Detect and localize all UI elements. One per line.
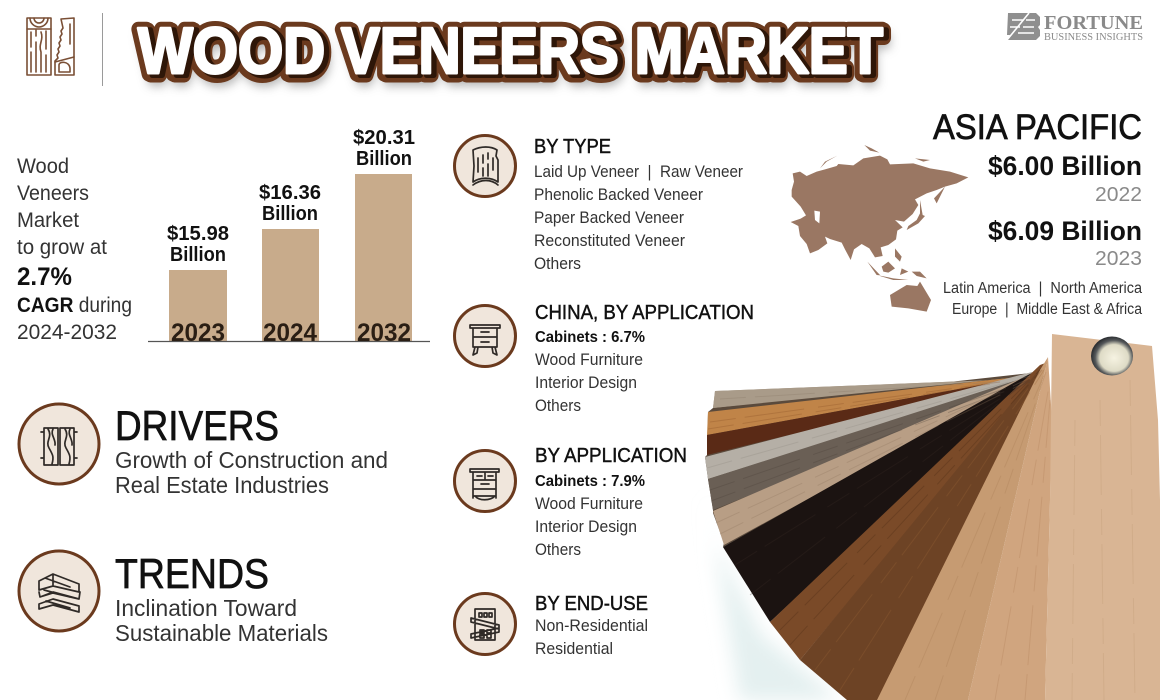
bar chart: 2024 xyxy=(263,319,317,347)
icon: nightstand xyxy=(454,306,516,366)
logo: Fortune Business Insights xyxy=(1007,12,1143,43)
panel: China by application: Interior Design xyxy=(535,374,637,392)
title: WOOD VENEERS MARKET xyxy=(138,15,883,88)
image: wood veneer fan xyxy=(705,334,1160,700)
CAGR text block: 2024-2032 xyxy=(17,321,117,344)
CAGR text block: CAGR during xyxy=(17,294,132,317)
panel: Asia Pacific stats: Latin America | North America xyxy=(943,280,1142,297)
icon: stacked boards xyxy=(19,551,99,631)
panel: Asia Pacific stats: 2023 xyxy=(1095,248,1142,270)
icon: building xyxy=(454,594,516,654)
panel: by application: Cabinets : 7.9% xyxy=(535,473,645,490)
icon: wood planks xyxy=(19,404,99,484)
panel: trends xyxy=(19,550,328,646)
panel: by application: Wood Furniture xyxy=(535,495,643,513)
panel: Asia Pacific stats xyxy=(933,108,1142,318)
CAGR text block: 2.7% xyxy=(17,263,72,291)
bar chart: 2023 xyxy=(171,319,225,347)
panel: trends: Inclination Toward xyxy=(115,595,297,621)
panel: by type: Reconstituted Veneer xyxy=(534,232,685,250)
bar chart: Billion xyxy=(356,148,412,170)
map: Asia Pacific xyxy=(791,145,968,312)
panel: drivers: DRIVERS xyxy=(115,402,279,449)
title: WOOD VENEERS MARKET xyxy=(138,14,883,87)
panel: by type: Others xyxy=(534,255,581,273)
header icon: wood log and saw xyxy=(27,18,74,75)
logo: Fortune Business Insights: BUSINESS INSIGHTS xyxy=(1044,32,1143,43)
panel: by type xyxy=(454,136,743,273)
panel: China by application: CHINA, BY APPLICATION xyxy=(535,302,754,324)
bar chart: $15.98 xyxy=(167,223,229,245)
panel: Asia Pacific stats: 2022 xyxy=(1095,184,1142,206)
panel: Asia Pacific stats: $6.09 Billion xyxy=(988,216,1142,246)
panel: by end-use: BY END-USE xyxy=(535,593,648,615)
bar chart: Billion xyxy=(262,203,318,225)
panel: drivers: Growth of Construction and xyxy=(115,447,388,473)
CAGR text block: to grow at xyxy=(17,236,107,259)
title: WOOD VENEERS MARKET xyxy=(142,16,887,89)
panel: by type: Laid Up Veneer | Raw Veneer xyxy=(534,163,743,181)
panel: by end-use xyxy=(454,593,648,658)
panel: trends: Sustainable Materials xyxy=(115,620,328,646)
title: WOOD VENEERS MARKET xyxy=(142,23,887,96)
icon: veneer sheet xyxy=(454,136,516,196)
panel: by application: Others xyxy=(535,541,581,559)
header divider xyxy=(102,13,104,86)
panel: by application: Interior Design xyxy=(535,518,637,536)
bar chart xyxy=(148,127,430,347)
panel: by type: Phenolic Backed Veneer xyxy=(534,186,703,204)
bar chart: Billion xyxy=(170,244,226,266)
CAGR text block xyxy=(17,155,132,344)
panel: by type: Paper Backed Veneer xyxy=(534,209,684,227)
panel: by type: BY TYPE xyxy=(534,136,611,158)
veneer grain lines xyxy=(707,370,1135,700)
panel: by end-use: Non-Residential xyxy=(535,617,648,635)
bar chart: $16.36 xyxy=(259,182,321,204)
logo: Fortune Business Insights: FORTUNE xyxy=(1044,12,1143,34)
panel: China by application: Others xyxy=(535,397,581,415)
bar chart: $20.31 xyxy=(353,127,415,149)
panel: drivers xyxy=(19,402,388,498)
panel: China by application: Cabinets : 6.7% xyxy=(535,329,645,346)
panel: Asia Pacific stats: $6.00 Billion xyxy=(988,151,1142,181)
CAGR text block: Market xyxy=(17,209,79,232)
panel: China by application: Wood Furniture xyxy=(535,351,643,369)
panel: China by application xyxy=(454,302,754,415)
title: WOOD VENEERS MARKET xyxy=(140,16,885,89)
panel: drivers: Real Estate Industries xyxy=(115,472,329,498)
CAGR text block: Wood xyxy=(17,155,69,178)
panel: by application: BY APPLICATION xyxy=(535,445,687,467)
panel: by end-use: Residential xyxy=(535,640,613,658)
icon: dresser xyxy=(454,450,516,512)
bar chart: 2032 xyxy=(357,319,411,347)
panel: by application xyxy=(454,445,687,559)
panel: Asia Pacific stats: Europe | Middle East & Africa xyxy=(952,301,1142,318)
panel: Asia Pacific stats: ASIA PACIFIC xyxy=(933,108,1142,147)
panel: trends: TRENDS xyxy=(115,550,269,597)
CAGR text block: Veneers xyxy=(17,182,89,205)
